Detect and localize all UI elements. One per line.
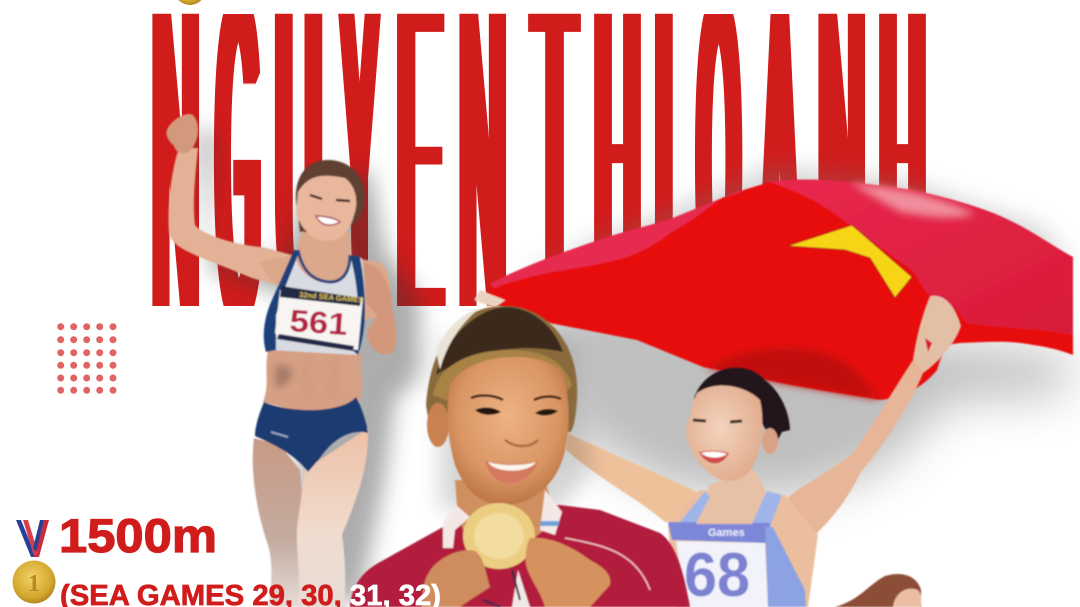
hair back — [296, 160, 365, 232]
flag sheen — [850, 183, 975, 218]
smile — [485, 461, 538, 483]
flag body — [490, 180, 1073, 400]
neck — [455, 480, 556, 550]
right hand — [913, 296, 961, 373]
left arm — [566, 433, 700, 522]
hair — [694, 368, 790, 445]
person: right athlete with flag — [474, 290, 961, 607]
neck and shoulders — [258, 232, 390, 320]
shadow: flag — [520, 165, 1075, 500]
dot pattern — [57, 323, 116, 394]
right hand — [526, 538, 610, 607]
ear — [427, 403, 449, 447]
left hand — [422, 550, 490, 607]
hair — [426, 306, 577, 432]
nose shade — [505, 440, 538, 446]
raised arm — [168, 148, 292, 284]
brows and eyes — [471, 396, 561, 400]
race bib: 32nd SEA GAMES — [299, 290, 364, 305]
ear — [762, 428, 778, 454]
torso — [263, 350, 362, 415]
icon: medal with ribbon: 1 — [28, 571, 40, 597]
bib: Games — [708, 527, 745, 539]
flag grip left — [474, 290, 506, 308]
flag upper fold left — [490, 190, 745, 288]
torso — [668, 490, 818, 607]
singlet — [265, 250, 365, 355]
face — [448, 357, 569, 505]
icon: medal at top edge — [175, 0, 205, 5]
face — [296, 176, 356, 241]
shadow: left athlete — [197, 125, 420, 600]
person: center athlete with gold medal — [350, 306, 690, 607]
flag — [490, 180, 1073, 400]
right arm — [363, 262, 397, 355]
right arm — [788, 360, 923, 545]
flag upper fold right — [770, 180, 1073, 335]
race bib — [275, 286, 364, 351]
singlet band — [668, 522, 770, 543]
face — [686, 386, 762, 481]
shadow: center athlete — [440, 340, 590, 510]
person: small head bottom right — [835, 574, 921, 607]
jersey — [350, 505, 690, 607]
flag star — [787, 225, 912, 298]
shorts — [255, 397, 368, 472]
title — [152, 14, 926, 306]
collar — [443, 490, 562, 548]
icon: medal with ribbon — [12, 520, 56, 604]
stat: 1500m: 1500m — [59, 509, 217, 562]
lanyard — [512, 570, 530, 607]
right leg — [297, 428, 368, 607]
fist — [166, 114, 198, 154]
singlet straps — [680, 491, 782, 527]
neck — [696, 470, 766, 524]
side panel — [765, 527, 806, 607]
race bib: 561 — [289, 303, 349, 342]
person: left runner — [166, 114, 397, 607]
bib — [676, 527, 768, 607]
gold medal — [463, 503, 535, 569]
left leg — [253, 438, 310, 607]
flag lower shadow — [705, 347, 880, 400]
